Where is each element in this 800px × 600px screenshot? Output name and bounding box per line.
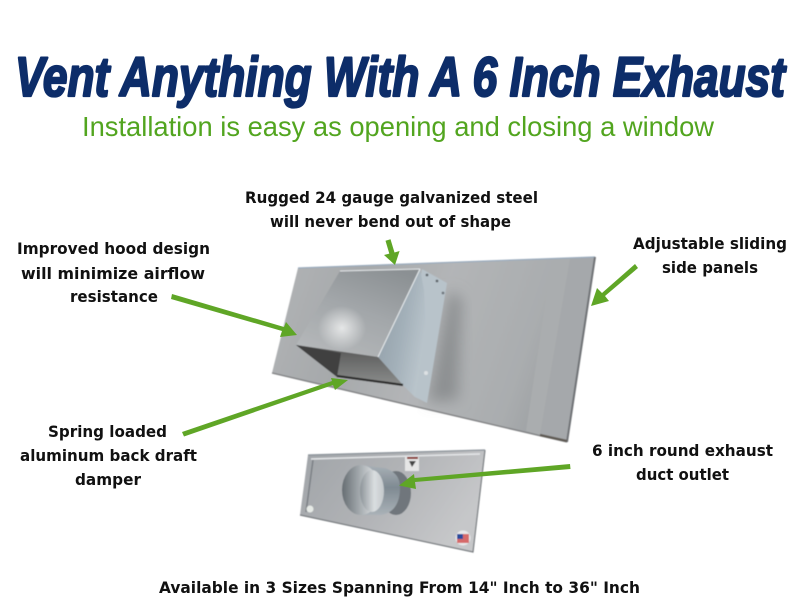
arrow: steel <box>384 239 400 265</box>
arrow: duct outlet <box>399 464 570 489</box>
hood flange <box>403 269 447 403</box>
label: back draft damper <box>20 422 197 489</box>
hood glare <box>318 306 366 350</box>
damper <box>337 376 403 385</box>
tray <box>300 450 485 552</box>
label: galvanized steel: Rugged 24 gauge galvanized steel <box>245 188 538 207</box>
label: duct outlet: duct outlet <box>636 465 729 484</box>
label: hood design: will minimize airflow <box>21 264 205 283</box>
flange screws <box>426 274 428 276</box>
subtitle: Installation is easy as opening and closing a window <box>82 111 715 142</box>
hood top <box>296 269 420 357</box>
flag sticker <box>456 530 470 546</box>
main panel <box>272 257 595 442</box>
duct body <box>360 465 400 515</box>
duct opening <box>342 465 380 515</box>
product: window vent panel with hood <box>272 257 595 442</box>
sliding side panel <box>540 257 595 442</box>
warning label <box>405 457 419 471</box>
label: duct outlet: 6 inch round exhaust <box>592 441 773 460</box>
hood opening <box>296 345 403 385</box>
label: duct outlet <box>592 441 773 484</box>
arrow: side panels <box>591 264 638 306</box>
arrow: hood <box>171 294 297 337</box>
label: galvanized steel <box>245 188 538 231</box>
small sticker <box>306 506 314 512</box>
label: hood design <box>17 239 210 306</box>
arrow: damper <box>182 378 348 436</box>
hood shadow <box>428 290 462 402</box>
hood side <box>378 269 426 397</box>
label: back draft damper: damper <box>75 470 141 489</box>
duct back collar <box>381 471 411 515</box>
label: sliding side panels <box>633 234 787 277</box>
panel edge highlights <box>298 257 595 268</box>
label: hood design: resistance <box>70 287 158 306</box>
label: back draft damper: Spring loaded <box>48 422 167 441</box>
label: sliding side panels: side panels <box>662 258 758 277</box>
label: back draft damper: aluminum back draft <box>20 446 197 465</box>
label: sliding side panels: Adjustable sliding <box>633 234 787 253</box>
label: galvanized steel: will never bend out of shape <box>270 212 511 231</box>
product: rear view with round duct <box>300 450 485 552</box>
label: hood design: Improved hood design <box>17 239 210 258</box>
footer: available sizes: Available in 3 Sizes Spanning From 14" Inch to 36" Inch <box>159 578 640 597</box>
